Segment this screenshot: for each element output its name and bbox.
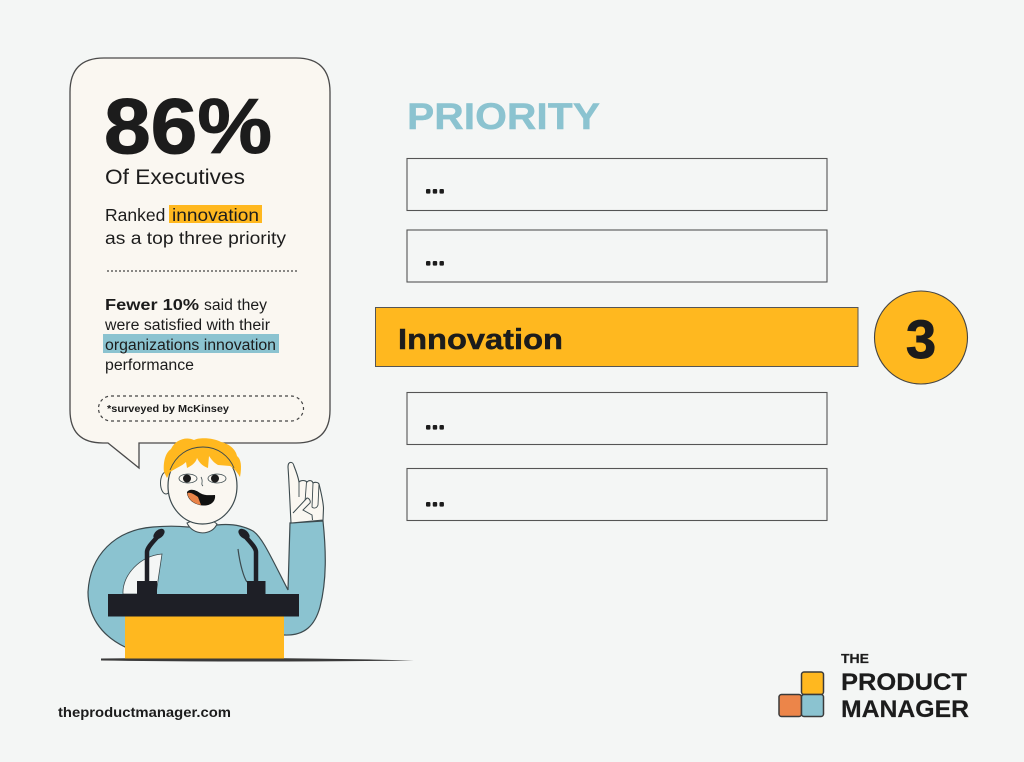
speech bubble panel: [70, 58, 330, 468]
ground shadow: [101, 658, 414, 662]
hairline: [170, 447, 234, 470]
text: ranked innovation: Ranked: [105, 205, 165, 225]
body: [88, 521, 325, 647]
highlight: innovation yellow: [169, 205, 262, 223]
mouth: [187, 490, 215, 506]
head: [168, 448, 237, 524]
pointing hand: [288, 462, 324, 523]
heading: priority: PRIORITY: [407, 96, 600, 137]
hair: [164, 438, 241, 478]
list item 2: ...: [426, 252, 444, 268]
text: ranked innovation: innovation: [172, 205, 259, 225]
illustration: presenter at podium: [88, 438, 414, 662]
logo icon: [779, 672, 824, 716]
eyes: [179, 474, 226, 483]
arm gap: [123, 554, 162, 594]
list item 4: ...: [426, 416, 444, 432]
podium base: [125, 616, 284, 658]
text: fewer 10%: said they: [204, 297, 267, 314]
highlighted item: innovation: Innovation: [398, 324, 563, 356]
text: performance: performance: [105, 357, 194, 374]
sleeve fold: [238, 549, 247, 582]
label: of executives: Of Executives: [105, 166, 245, 189]
statistic: 86%: 86%: [104, 82, 272, 170]
logo: [779, 651, 969, 723]
source pill: *surveyed by McKinsey: [107, 403, 229, 415]
list item 2: [407, 230, 827, 282]
text: were satisfied: were satisfied with their: [104, 317, 270, 334]
podium top: [108, 594, 299, 616]
footer url: theproductmanager.com: [58, 704, 231, 720]
highlight: organizations innovation blue: [103, 334, 279, 353]
text: organizations innovation: organizations innovation: [105, 337, 276, 354]
logo wordmark: PRODUCT: [841, 669, 967, 696]
list item 4: [407, 392, 827, 444]
rank badge: 3: 3: [906, 310, 936, 370]
list item 5: ...: [426, 492, 444, 510]
microphones: [137, 527, 266, 595]
logo wordmark: MANAGER: [841, 696, 969, 723]
logo wordmark: [841, 651, 969, 723]
highlighted item: innovation: [376, 308, 858, 366]
rank badge: 3: [874, 291, 968, 384]
list item 1: [407, 158, 827, 210]
logo wordmark: THE: [841, 651, 869, 666]
nose: [201, 477, 203, 486]
list item 5: [407, 468, 827, 520]
ear: [160, 472, 172, 494]
list item 1: ...: [426, 180, 444, 196]
source pill: [98, 396, 304, 421]
text: fewer 10%: Fewer 10%: [105, 297, 199, 314]
collar: [187, 515, 217, 533]
text: top three priority: as a top three priority: [105, 228, 286, 248]
